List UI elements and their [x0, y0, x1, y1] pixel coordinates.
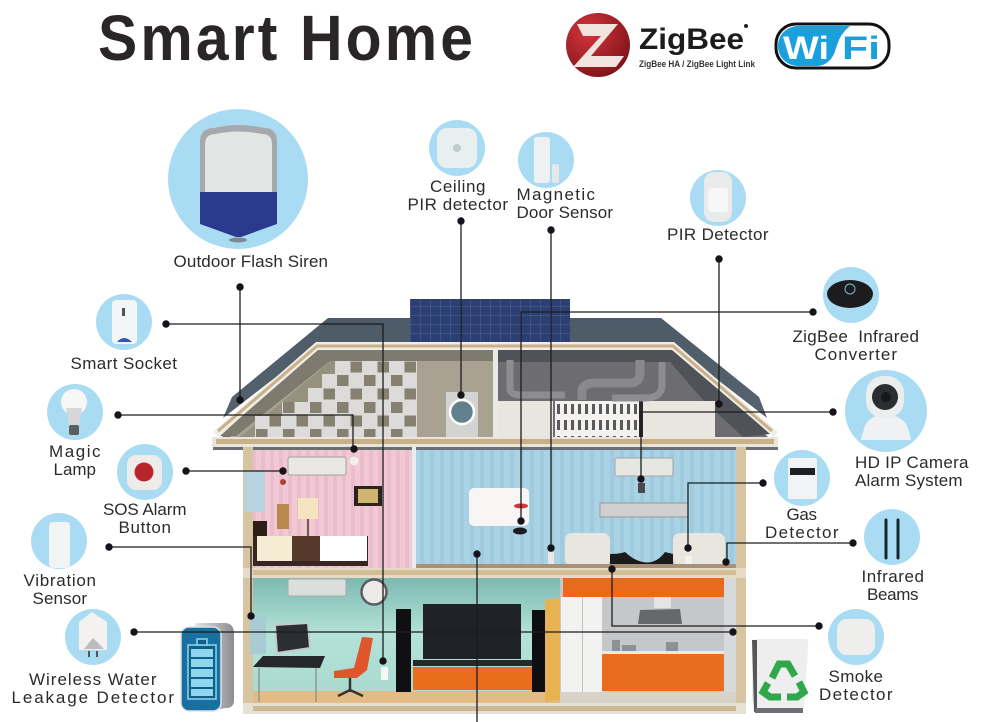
logo: ZigBee: ZigBee HA / ZigBee Light Link	[639, 59, 756, 70]
device: gas detector: Gas	[786, 505, 818, 524]
device: infrared beams: Beams	[867, 585, 919, 604]
device: wireless water leakage detector: Leakage Detector	[12, 688, 174, 707]
device: vibration sensor: Vibration	[24, 571, 96, 590]
house	[212, 299, 778, 714]
device: SOS alarm button: SOS Alarm	[103, 500, 187, 519]
room: bedroom	[244, 450, 412, 569]
device: smart socket	[70, 294, 178, 373]
solar panel	[410, 299, 570, 343]
device: wireless water leakage detector	[12, 609, 174, 707]
device: ZigBee infrared converter	[792, 267, 920, 364]
device: smart socket: Smart Socket	[70, 354, 178, 373]
device: SOS alarm button	[103, 444, 187, 537]
device: infrared beams: Infrared	[862, 567, 924, 586]
device: wireless water leakage detector: Wireless Water	[29, 670, 157, 689]
device: HD IP camera: Alarm System	[855, 471, 963, 490]
device: ceiling PIR detector: Ceiling	[430, 177, 486, 196]
device: magnetic door sensor	[516, 132, 614, 222]
logo: ZigBee	[566, 13, 756, 77]
logo: ZigBee: ZigBee	[639, 23, 744, 56]
floor beams	[243, 568, 746, 714]
device: ceiling PIR detector: PIR detector	[408, 195, 508, 214]
room: living room	[412, 447, 736, 569]
recycle bin	[752, 639, 808, 713]
device: magic lamp	[47, 384, 103, 479]
connector lines	[105, 217, 857, 722]
device: vibration sensor	[24, 513, 96, 608]
device: gas detector: Detector	[765, 523, 839, 542]
device: smoke detector	[819, 609, 893, 704]
device: magic lamp: Magic	[49, 442, 101, 461]
room: study and lounge	[250, 578, 560, 703]
logo: Wi-Fi: Fi	[842, 30, 880, 66]
device: ZigBee infrared converter: Converter	[814, 345, 898, 364]
walls	[243, 447, 746, 713]
logo: Wi-Fi: Wi	[783, 30, 829, 66]
device: ZigBee infrared converter: ZigBee Infrared	[792, 327, 920, 346]
device: gas detector	[765, 450, 839, 542]
device: HD IP camera: HD IP Camera	[855, 453, 969, 472]
roof	[223, 318, 767, 418]
device: vibration sensor: Sensor	[32, 589, 88, 608]
device: smoke detector: Smoke	[828, 667, 884, 686]
device: SOS alarm button: Button	[118, 518, 172, 537]
room: kitchen	[560, 578, 736, 703]
device: magnetic door sensor: Door Sensor	[516, 203, 614, 222]
device: PIR detector: PIR Detector	[667, 225, 769, 244]
device: smoke detector: Detector	[819, 685, 893, 704]
device: HD IP camera	[845, 370, 969, 490]
roof beams	[212, 342, 778, 450]
device: magnetic door sensor: Magnetic	[516, 185, 596, 204]
device: infrared beams	[862, 509, 924, 604]
title: Smart Home	[98, 3, 476, 75]
logo: Wi-Fi	[776, 24, 889, 68]
device: outdoor flash siren	[168, 109, 328, 271]
device: PIR detector	[667, 170, 769, 244]
attic	[220, 346, 770, 438]
battery	[181, 623, 234, 712]
device: outdoor flash siren: Outdoor Flash Siren	[174, 252, 328, 271]
device: magic lamp: Lamp	[54, 460, 96, 479]
device: ceiling PIR detector	[408, 120, 508, 214]
